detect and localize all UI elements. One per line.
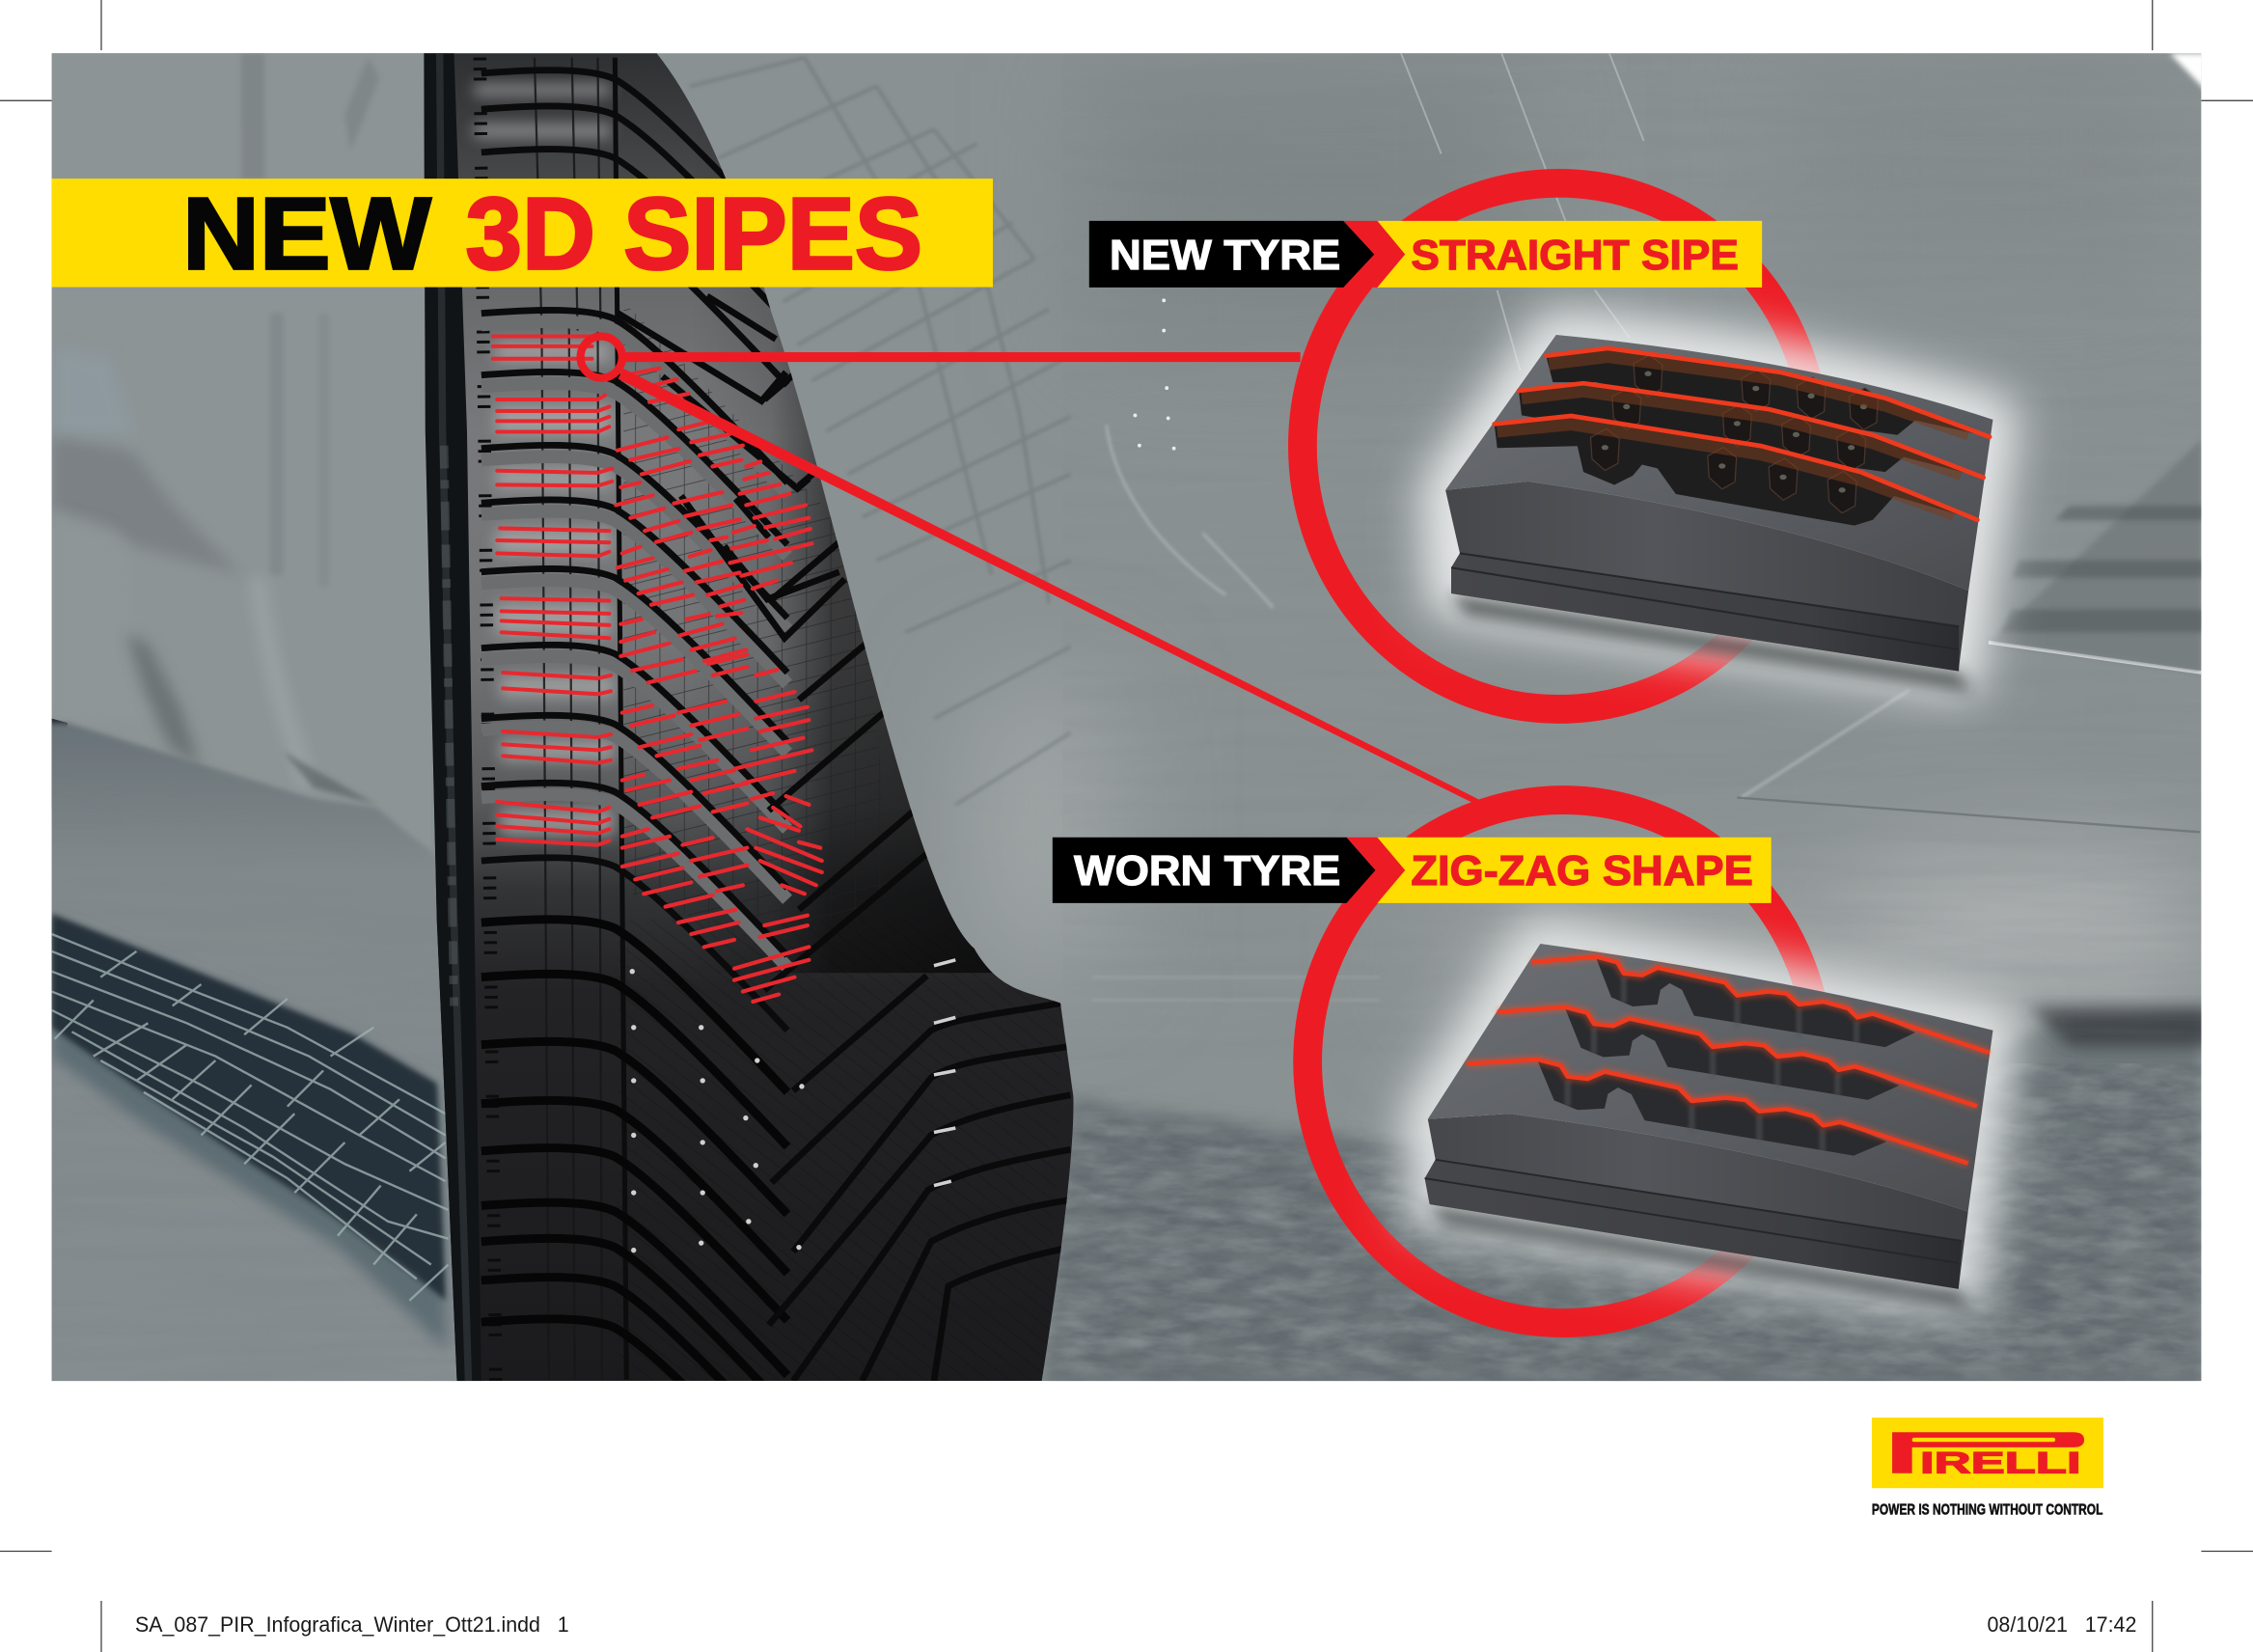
label: new tyre / straight sipe bbox=[1089, 221, 1762, 288]
zig-zag sipe 2 bbox=[1497, 1006, 1977, 1106]
red sipes: shoulder rows bbox=[493, 336, 612, 845]
white stone ejector dots bbox=[630, 960, 955, 1253]
circumferential line bbox=[615, 58, 626, 1380]
car body, left bbox=[52, 53, 431, 848]
drop shadow bbox=[1430, 1204, 1971, 1310]
sipe pins bbox=[1590, 355, 1878, 513]
headlight and car details, right bbox=[1086, 53, 2201, 1002]
drop shadow bbox=[1451, 593, 1971, 693]
outer haze bbox=[1445, 335, 1992, 671]
shoulder slits bbox=[480, 58, 496, 1381]
sidewall bbox=[417, 53, 481, 1381]
zig-zag sipe 3 bbox=[1467, 1059, 1968, 1163]
title banner: NEW bbox=[182, 178, 431, 291]
base ledge bbox=[1451, 553, 1959, 671]
connector: pointer ring and leader lines bbox=[581, 336, 1478, 805]
red sipes: central diagonal hatching bbox=[616, 369, 822, 1002]
logo: Pirelli: IRELLI bbox=[1920, 1446, 2081, 1480]
date stamp: 08/10/21 17:42 bbox=[1988, 1612, 2136, 1637]
title banner bbox=[52, 178, 993, 291]
callout ring: worn tyre bbox=[1307, 800, 1819, 1323]
ghost tyre reflection bbox=[690, 58, 1070, 805]
label: new tyre / straight sipe: NEW TYRE bbox=[1110, 233, 1340, 279]
file slug: SA_087_PIR_Infografica_Winter_Ott21.indd 1 bbox=[135, 1612, 569, 1637]
small vertical block cuts bbox=[535, 58, 602, 1380]
front face bbox=[1445, 482, 1968, 671]
tyre body bbox=[417, 53, 1092, 1381]
chevron arms bbox=[618, 267, 1070, 1381]
label: worn tyre / zig-zag shape bbox=[1053, 838, 1772, 903]
dark tyre track on snow bbox=[52, 914, 449, 1351]
ground left bbox=[43, 723, 488, 1401]
label: worn tyre / zig-zag shape: ZIG-ZAG SHAPE bbox=[1411, 848, 1753, 895]
fine tread texture bbox=[618, 920, 1063, 1381]
glow bbox=[1445, 335, 1992, 671]
sipe slot 3 bbox=[1495, 416, 1977, 526]
label: worn tyre / zig-zag shape: WORN TYRE bbox=[1074, 848, 1340, 895]
front face bbox=[1425, 1114, 1968, 1289]
base ledge bbox=[1425, 1160, 1962, 1289]
ground right bbox=[1042, 1013, 2201, 1408]
snow texture bbox=[1005, 1063, 2201, 1381]
dark bumper wedge, right bbox=[1989, 440, 2212, 673]
worn tyre block: zig-zag sipes bbox=[1425, 944, 1992, 1310]
callout ring: new tyre bbox=[1303, 183, 1816, 709]
light ribs beside grooves bbox=[481, 321, 787, 967]
sipe slot 1 bbox=[1546, 348, 1990, 437]
title banner: 3D SIPES bbox=[465, 178, 922, 291]
top face bbox=[1445, 335, 1992, 591]
tread block grid bbox=[623, 302, 891, 949]
zig-zag sipe 1 bbox=[1531, 956, 1990, 1053]
logo: Pirelli bbox=[1872, 1418, 2103, 1488]
tyre lighting bbox=[468, 75, 993, 973]
brown glow under sipes bbox=[1497, 356, 1968, 514]
label: new tyre / straight sipe: STRAIGHT SIPE bbox=[1411, 233, 1739, 279]
tread grooves bbox=[481, 70, 787, 1031]
new tyre block: straight sipes bbox=[1445, 335, 1992, 693]
tyre bbox=[424, 53, 1073, 1382]
sipe slot 2 bbox=[1519, 383, 1984, 478]
glow bbox=[1428, 944, 1992, 1289]
background photo: car in snow bbox=[43, 53, 2212, 1408]
tagline: POWER IS NOTHING WITHOUT CONTROL bbox=[1872, 1501, 2103, 1518]
red top edges bbox=[1495, 348, 1990, 520]
top face bbox=[1428, 944, 1992, 1211]
outer haze bbox=[1428, 944, 1992, 1289]
